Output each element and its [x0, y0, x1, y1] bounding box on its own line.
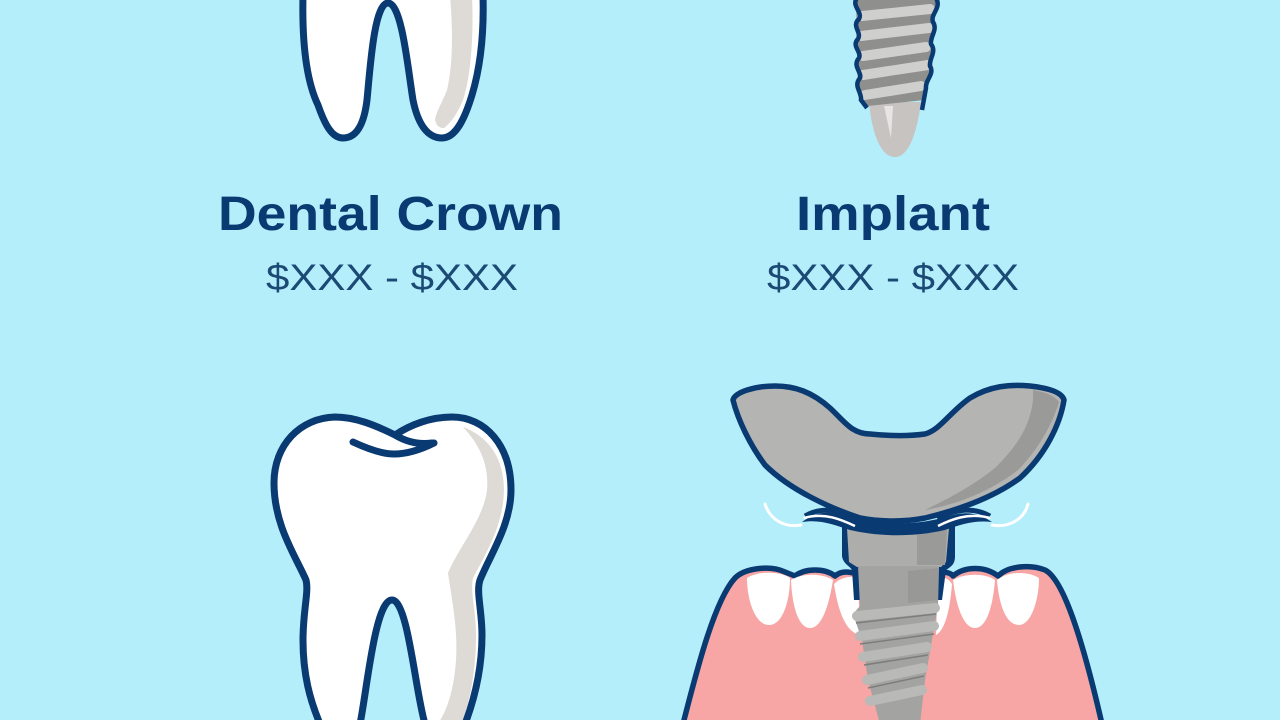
- icon: implant with abutment and gums (bottom): [683, 385, 1102, 720]
- icon: dental implant screw tip (top): [855, 0, 938, 157]
- heading: Dental Crown: Dental Crown: [218, 188, 563, 241]
- abutment neck: [842, 524, 955, 600]
- screw collar and threads: [853, 566, 939, 720]
- price: Implant: $XXX - $XXX: [767, 257, 1019, 298]
- heading: Implant: Implant: [796, 188, 990, 241]
- icon: dental crown tooth (bottom): [274, 417, 511, 720]
- crown seat collar: [802, 512, 992, 535]
- white highlights: [765, 504, 801, 526]
- gum: [683, 567, 1102, 720]
- price: Dental Crown: $XXX - $XXX: [266, 257, 518, 298]
- crown body: [733, 385, 1064, 521]
- teeth: [747, 573, 1039, 635]
- icon: dental crown tooth roots (top): [303, 0, 483, 138]
